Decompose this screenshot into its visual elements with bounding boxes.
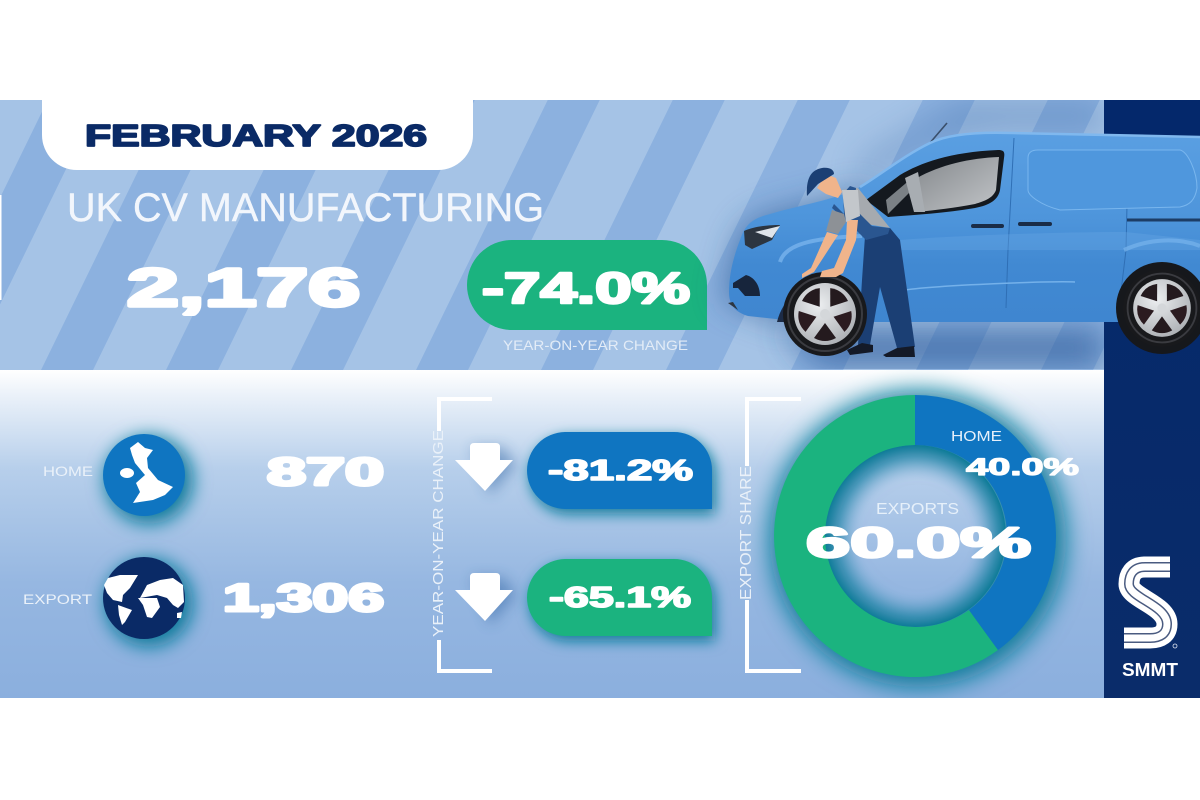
- total figure: 2,176: 2,176: [127, 258, 360, 318]
- chart: export share donut: [770, 391, 1066, 687]
- logo: SMMT: SMMT: [1122, 660, 1178, 680]
- icon: export world circle: [103, 557, 193, 647]
- badge: home change: [527, 432, 715, 514]
- badge: export change: -65.1%: [549, 582, 691, 614]
- logo: SMMT: [1122, 567, 1178, 680]
- badge: home change: -81.2%: [548, 455, 693, 487]
- date tab: February 2026: [42, 100, 473, 170]
- badge: total year-on-year change: -74.0%: [482, 264, 690, 313]
- title: UK CV Manufacturing: UK CV MANUFACTURING: [67, 186, 544, 230]
- segment: exports 60%: [774, 395, 998, 677]
- label: export: EXPORT: [23, 591, 93, 607]
- figure: 1,306: 1,306: [223, 577, 384, 620]
- mechanic torso: [841, 188, 890, 228]
- left edge highlight: [0, 195, 2, 300]
- door and panel lines: [1006, 138, 1014, 308]
- headlight and fog lamp: [744, 225, 780, 249]
- wheel arches: [1116, 262, 1200, 354]
- bracket: export share: EXPORT SHARE: [738, 466, 755, 600]
- antenna: [929, 123, 947, 144]
- figure: 40.0%: 40.0%: [966, 454, 1079, 481]
- mechanic legs: [858, 228, 915, 348]
- arrow: export down: [455, 573, 516, 625]
- van body: [729, 133, 1200, 322]
- panel: navy sidebar: [1104, 100, 1200, 698]
- panel: top banner with diagonal stripes: [0, 100, 1104, 370]
- arrow: home down: [455, 443, 516, 495]
- caption: year-on-year change: YEAR-ON-YEAR CHANGE: [503, 337, 688, 353]
- mechanic arms: [820, 220, 858, 277]
- icon: home UK circle: [103, 434, 193, 524]
- segment: home 40%: [915, 395, 1056, 650]
- front wheel: [783, 272, 867, 356]
- rear wheel: [1123, 269, 1200, 347]
- panel: lower statistics background: [0, 370, 1104, 698]
- figure: 870: 870: [267, 451, 384, 494]
- mechanic head: [817, 174, 842, 198]
- badge: total year-on-year change: [467, 240, 707, 330]
- windows: [866, 150, 1004, 217]
- bracket: export share: [738, 399, 801, 671]
- door handles: [973, 224, 1050, 226]
- illustration: blue van with mechanic: [722, 100, 1200, 368]
- badge: export change: [527, 559, 715, 641]
- bracket: year-on-year change: YEAR-ON-YEAR CHANGE: [430, 430, 447, 637]
- label: home: HOME: [43, 463, 93, 479]
- bracket: year-on-year change: [430, 399, 492, 671]
- label: exports share: EXPORTS: [876, 501, 959, 518]
- figure: 60.0%: 60.0%: [806, 519, 1031, 567]
- label: home share: HOME: [951, 428, 1002, 445]
- date tab: February 2026: FEBRUARY 2026: [85, 118, 427, 153]
